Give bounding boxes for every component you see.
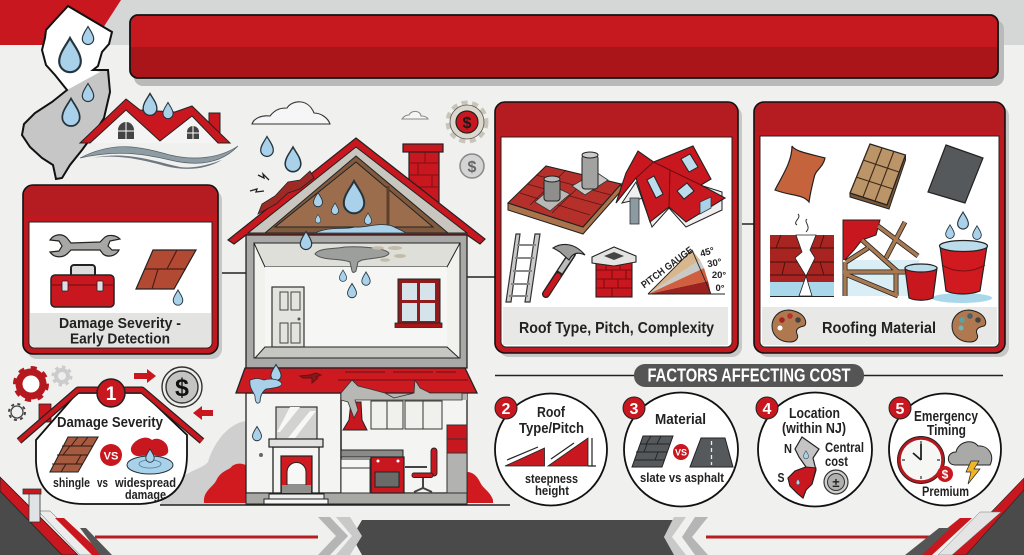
icon: grey gear — [53, 367, 71, 385]
icon: dollar coin — [460, 154, 484, 178]
caption: slate vs asphalt — [640, 470, 725, 485]
house roof — [19, 390, 202, 441]
factor 2: roof type/pitch — [495, 394, 607, 506]
heading: Roof — [537, 404, 566, 421]
number badge 4: 4 — [763, 401, 772, 418]
factor 5: emergency timing — [889, 394, 1001, 506]
bucket large — [940, 212, 988, 294]
top grey strip — [90, 0, 1024, 45]
icon: widespread damage puddle — [127, 438, 173, 474]
heading: Damage Severity — [57, 414, 164, 431]
main house lower floor — [236, 364, 477, 504]
oven — [371, 457, 404, 493]
icon: clock — [898, 436, 944, 484]
icon: dollar coin: $ — [175, 374, 189, 402]
number badge 5: 5 — [896, 401, 905, 418]
fridge — [447, 425, 467, 493]
ground line — [160, 504, 510, 506]
icon: slate — [632, 436, 673, 467]
number badge 2: 2 — [502, 401, 511, 418]
labels: S — [778, 470, 785, 485]
icon: toolbox — [51, 265, 114, 307]
cabinets — [371, 401, 442, 429]
labels: cost — [825, 454, 848, 469]
mirror — [276, 407, 317, 440]
heading — [914, 409, 978, 439]
room — [246, 232, 467, 368]
caption: height — [535, 483, 570, 498]
chevrons left — [318, 517, 362, 555]
number badge 1: 1 — [106, 384, 117, 405]
icon: slate tile — [928, 145, 983, 203]
pitch gauge: 30° — [707, 257, 723, 270]
cracked roof — [770, 214, 834, 296]
icon: asphalt road — [690, 438, 733, 467]
red footer lines — [95, 536, 930, 538]
icon: dollar coin: $ — [468, 159, 477, 176]
caption: Roof Type, Pitch, Complexity — [519, 320, 714, 337]
roof section with vents — [508, 152, 621, 234]
clouds — [252, 102, 428, 124]
icon: dollar coin — [162, 367, 202, 407]
icon: outline gear — [9, 404, 25, 420]
complex roof house — [616, 146, 725, 227]
caption — [59, 315, 181, 348]
factor 1: damage severity — [9, 367, 213, 504]
caption — [53, 475, 176, 502]
arrow right — [134, 369, 156, 383]
vs badge: VS — [675, 448, 687, 458]
window left — [118, 122, 134, 139]
grey cloud behind lower house — [160, 421, 246, 505]
pitch gauge: 20° — [712, 270, 726, 281]
caption band — [30, 313, 211, 347]
icon: palette left — [772, 310, 806, 342]
caption: steepness — [525, 471, 578, 486]
icon: plus minus coin: ± — [832, 475, 840, 490]
icon: wrench — [50, 235, 120, 257]
top-left red corner — [0, 0, 121, 45]
red bush left — [204, 464, 246, 503]
window right — [187, 126, 199, 139]
range hood — [343, 402, 367, 430]
window — [395, 279, 442, 328]
fireplace — [264, 439, 328, 504]
caption: Roofing Material — [822, 320, 936, 337]
door — [272, 287, 304, 347]
pitch gauge: 0° — [715, 283, 725, 294]
attic roof — [228, 138, 485, 244]
panel: roof type, pitch, complexity — [495, 102, 742, 357]
pitch gauge — [639, 245, 726, 294]
vs badge: VS — [104, 450, 118, 462]
red lower roof — [236, 364, 477, 418]
icon: brick chimney — [592, 247, 636, 297]
icon: red gear — [15, 368, 47, 400]
panel: roofing material — [754, 102, 1009, 357]
section heading: factors affecting cost: FACTORS AFFECTING COST — [648, 366, 850, 386]
house card — [36, 393, 187, 504]
icon: cracked shingle with drop — [136, 250, 196, 305]
caption band — [762, 307, 997, 345]
heading — [782, 406, 846, 437]
broken rafters — [843, 220, 919, 296]
bottom-left corner stripes — [0, 477, 112, 555]
red bush right — [467, 472, 493, 503]
number badge 3: 3 — [630, 401, 639, 418]
small house with rain — [80, 94, 238, 169]
caption: Damage Severity - — [59, 315, 181, 332]
icon: wood shakes — [850, 144, 906, 209]
New Jersey map with rain drops — [22, 6, 112, 179]
panel: damage severity early detection — [23, 185, 222, 359]
factor 3: material — [623, 392, 738, 506]
caption: damage — [125, 487, 166, 502]
icon: hammer — [546, 244, 585, 294]
drops above house — [250, 136, 301, 192]
icon: gear with dollar: $ — [463, 115, 472, 132]
icon: storm cloud — [948, 442, 992, 484]
icon: palette right — [952, 310, 986, 342]
icon: shingle grid — [50, 437, 98, 472]
icon: dollar badge: $ — [942, 468, 949, 482]
heading: Type/Pitch — [519, 420, 584, 437]
pitch triangles — [505, 438, 596, 466]
labels: N — [784, 441, 792, 456]
icon: gear with dollar — [448, 103, 486, 141]
main house upper floor — [228, 138, 485, 368]
ceiling water stain — [315, 247, 389, 272]
NJ map small — [788, 437, 819, 498]
heading: (within NJ) — [782, 421, 846, 437]
chimney — [403, 144, 443, 210]
caption: Early Detection — [70, 330, 170, 348]
section heading: factors affecting cost — [495, 364, 1003, 387]
caption — [525, 471, 578, 498]
heading: Material — [655, 411, 706, 428]
puddle — [932, 293, 992, 303]
heading: Emergency — [914, 409, 978, 425]
chevrons right — [664, 517, 708, 555]
house chimney — [39, 404, 51, 422]
labels — [778, 440, 864, 485]
heading: Location — [789, 406, 840, 422]
factor 4: location — [756, 392, 872, 506]
caption: Premium — [922, 484, 969, 499]
icon: clay tile — [775, 146, 825, 202]
vs badge — [100, 444, 122, 466]
icon: ladder — [506, 234, 540, 302]
bottom-right corner stripes — [905, 478, 1024, 555]
number badge 1 — [97, 379, 125, 407]
caption: vs — [97, 475, 108, 490]
connector lines — [218, 224, 754, 277]
pitch gauge: 45° — [699, 245, 716, 260]
bucket small — [905, 264, 937, 300]
heading: Timing — [927, 423, 966, 439]
title banner — [130, 15, 1004, 86]
pitch gauge: PITCH GAUGE — [639, 245, 696, 291]
caption band — [503, 307, 728, 345]
chair — [405, 448, 437, 492]
caption: shingle — [53, 475, 90, 490]
left wall drop — [252, 426, 262, 441]
arrow left — [193, 406, 213, 420]
labels: Central — [825, 440, 864, 455]
heading — [519, 404, 584, 437]
counter — [341, 450, 403, 493]
caption: widespread — [114, 475, 176, 490]
bottom dark band — [352, 520, 676, 555]
